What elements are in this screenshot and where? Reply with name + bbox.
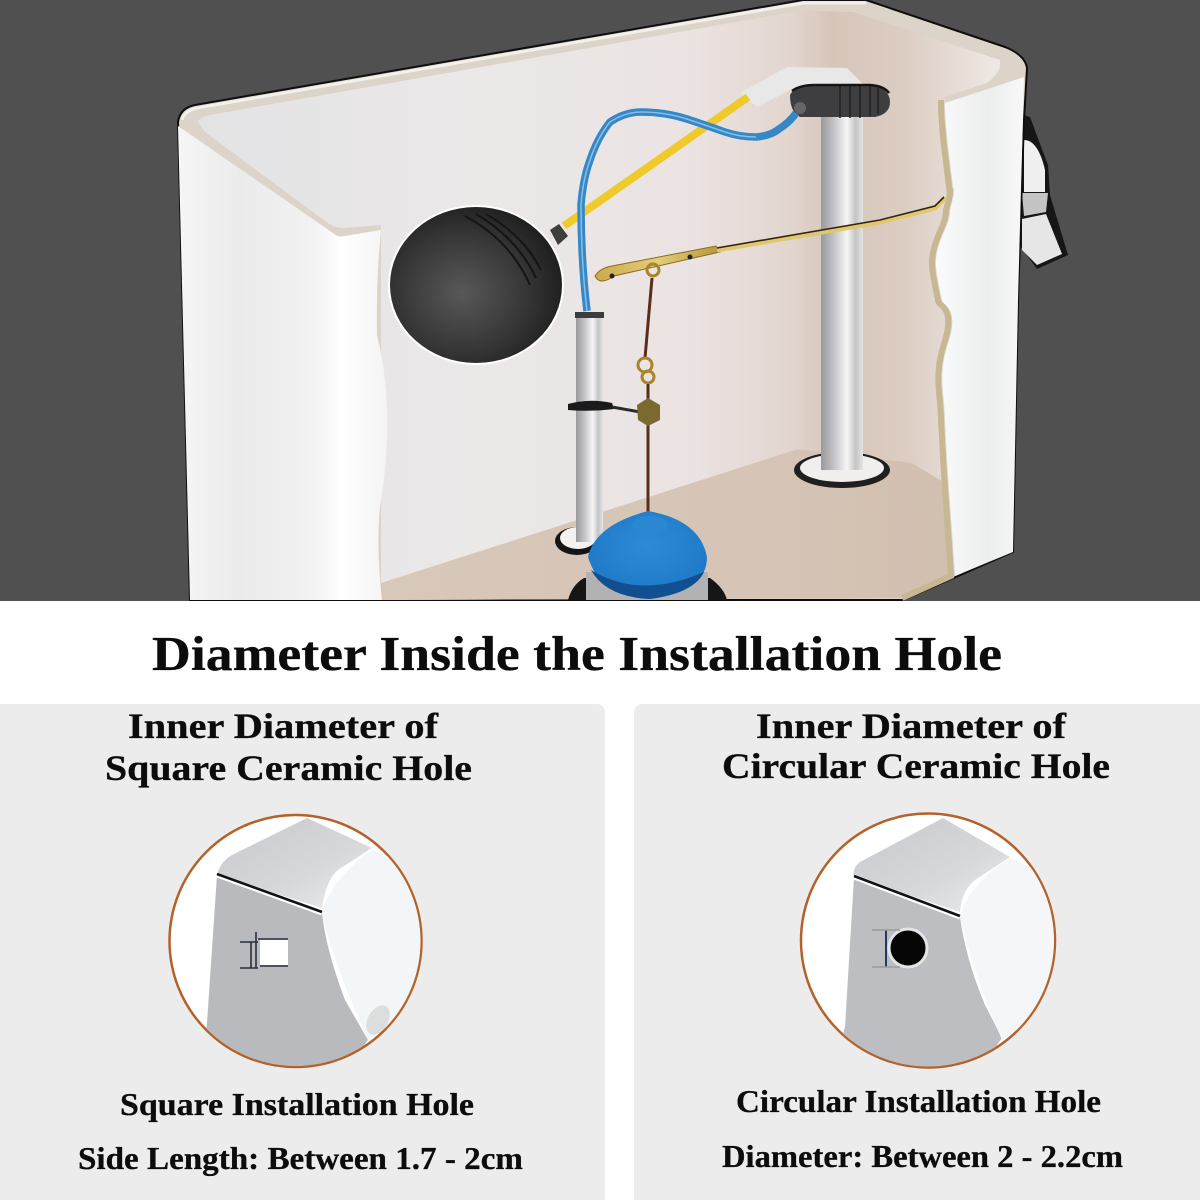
overflow tube: [555, 312, 640, 555]
white rim highlight: [182, 3, 866, 120]
tank shell with rim: [178, 0, 1027, 600]
right white wall with wavy cut edge: [936, 77, 1024, 576]
white band behind title: [0, 601, 1200, 704]
panel heading: square: [105, 706, 472, 788]
lift chain: [637, 264, 660, 512]
yellow float arm: [564, 97, 748, 226]
panel heading: square: Inner Diameter of: [128, 706, 439, 746]
blue hose: [581, 112, 796, 311]
right pillar: [794, 112, 890, 488]
panel heading: circular: Inner Diameter of: [756, 706, 1067, 746]
illustration: cutaway toilet tank: [178, 0, 1068, 600]
panel heading: circular: Circular Ceramic Hole: [722, 746, 1110, 786]
blue flapper: [588, 511, 707, 599]
white valve elbow: [740, 67, 863, 107]
dark background behind tank: [0, 0, 1200, 601]
caption: square hole: Square Installation Hole: [120, 1086, 474, 1122]
circular detail: tank corner with square hole: [170, 815, 425, 1075]
panel heading: circular: [722, 706, 1110, 786]
black nut: [790, 85, 890, 118]
float ball: [388, 205, 568, 365]
size: circular hole: Diameter: Between 2 - 2.2cm: [722, 1138, 1123, 1174]
panel: circular ceramic hole: [634, 704, 1200, 1200]
circular detail: tank corner with round hole: [801, 814, 1060, 1075]
left white front wall: [178, 126, 387, 600]
drop handle on outside: [1020, 115, 1068, 269]
round hole: [889, 929, 927, 967]
panel: square ceramic hole: [0, 704, 605, 1200]
square hole: [260, 940, 288, 965]
brass flush lever: [595, 197, 945, 281]
panel heading: square: Square Ceramic Hole: [105, 748, 472, 788]
wavy cut edge line: [902, 100, 951, 598]
flush valve base: [568, 572, 727, 600]
title: Diameter Inside the Installation Hole: [152, 626, 1002, 681]
interior back wall: [198, 10, 1000, 600]
caption: circular hole: Circular Installation Hole: [736, 1083, 1101, 1119]
size: square hole: Side Length: Between 1.7 - 2cm: [78, 1140, 523, 1176]
interior floor: [381, 449, 950, 600]
